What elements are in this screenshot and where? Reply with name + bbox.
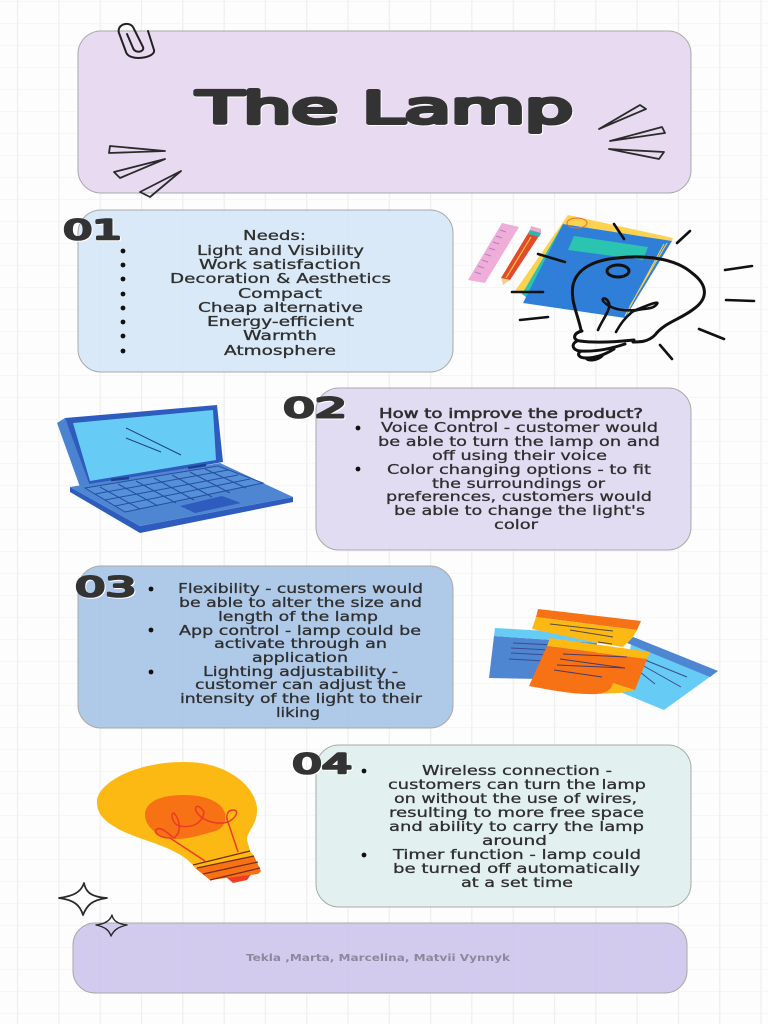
panel: how to improve the product bbox=[316, 388, 691, 550]
panel: footer bbox=[73, 923, 687, 993]
panel: features bbox=[78, 566, 453, 728]
list: features: intensity of the light to their bbox=[180, 692, 423, 707]
list: improvements: preferences, customers would bbox=[386, 490, 652, 505]
list: features: Flexibility - customers would bbox=[178, 582, 423, 597]
list: needs: Light and Visibility bbox=[197, 244, 364, 259]
list: wireless and timer: Timer function - lamp could bbox=[392, 848, 641, 863]
list: needs: Energy-efficient bbox=[207, 315, 354, 330]
bulb rays bbox=[512, 224, 754, 359]
notebook bbox=[515, 215, 673, 318]
list: features: activate through an bbox=[214, 637, 387, 652]
list: wireless and timer: at a set time bbox=[461, 876, 573, 891]
heading: how to improve: How to improve the product? bbox=[379, 407, 643, 422]
list: wireless and timer: customers can turn the lamp bbox=[388, 778, 646, 793]
list: features: application bbox=[252, 651, 348, 666]
list: features: customer can adjust the bbox=[195, 678, 406, 693]
panel: wireless and timer bbox=[316, 745, 691, 907]
list: wireless and timer: and ability to carry the lamp bbox=[389, 820, 644, 835]
list: features bbox=[149, 582, 423, 721]
list: improvements bbox=[356, 421, 660, 533]
icon: large sparkle bbox=[59, 883, 107, 915]
number 01: 01 bbox=[63, 215, 122, 246]
icon: yellow light bulb bbox=[97, 762, 261, 883]
list: needs: Cheap alternative bbox=[198, 301, 363, 316]
icon: left accent rays bbox=[109, 146, 181, 197]
list: improvements: Color changing options - to fit bbox=[387, 463, 651, 478]
list: wireless and timer: around bbox=[482, 834, 547, 849]
icon: right accent rays bbox=[599, 105, 665, 159]
list: features: App control - lamp could be bbox=[179, 624, 421, 639]
ruler bbox=[468, 223, 519, 283]
title: The Lamp bbox=[195, 83, 573, 134]
list: wireless and timer: Wireless connection - bbox=[422, 764, 612, 779]
icon: small sparkle bbox=[96, 915, 127, 936]
list: needs: Decoration & Aesthetics bbox=[170, 272, 391, 287]
list: improvements: be able to change the light's bbox=[394, 504, 645, 519]
list: wireless and timer: resulting to more free space bbox=[389, 806, 644, 821]
list: needs: Work satisfaction bbox=[199, 258, 361, 273]
list: improvements: be able to turn the lamp on and bbox=[378, 435, 660, 450]
list: improvements: Voice Control - customer would bbox=[381, 421, 658, 436]
list: wireless and timer: on without the use of wires, bbox=[394, 792, 637, 807]
list: needs: Atmosphere bbox=[224, 344, 336, 359]
heading: needs: Needs: bbox=[243, 229, 306, 244]
list: needs bbox=[121, 244, 391, 359]
icon: sticky notes bbox=[489, 609, 718, 710]
list: improvements: off using their voice bbox=[432, 449, 607, 464]
number 04: 04 bbox=[292, 749, 352, 780]
icon: laptop bbox=[57, 405, 293, 533]
panel: title banner bbox=[78, 31, 691, 193]
list: improvements: color bbox=[494, 518, 539, 533]
list: needs: Warmth bbox=[243, 329, 317, 344]
list: features: Lighting adjustability - bbox=[203, 665, 398, 680]
list: features: liking bbox=[276, 706, 320, 721]
number 02: 02 bbox=[283, 393, 347, 424]
list: wireless and timer: be turned off automatically bbox=[393, 862, 640, 877]
number 03: 03 bbox=[75, 572, 136, 603]
list: improvements: the surroundings or bbox=[432, 477, 606, 492]
credits: Tekla ,Marta, Marcelina, Matvii Vynnyk bbox=[246, 953, 510, 964]
icon: paperclip bbox=[119, 24, 154, 58]
icon: notebook, ruler, pencil and bulb outline bbox=[468, 215, 754, 360]
panel: needs bbox=[78, 210, 453, 372]
list: features: be able to alter the size and bbox=[179, 596, 422, 611]
list: features: length of the lamp bbox=[218, 610, 378, 625]
list: needs: Compact bbox=[238, 287, 322, 302]
pencil bbox=[501, 226, 541, 285]
bulb outline bbox=[572, 257, 704, 360]
list: wireless and timer bbox=[362, 764, 646, 891]
